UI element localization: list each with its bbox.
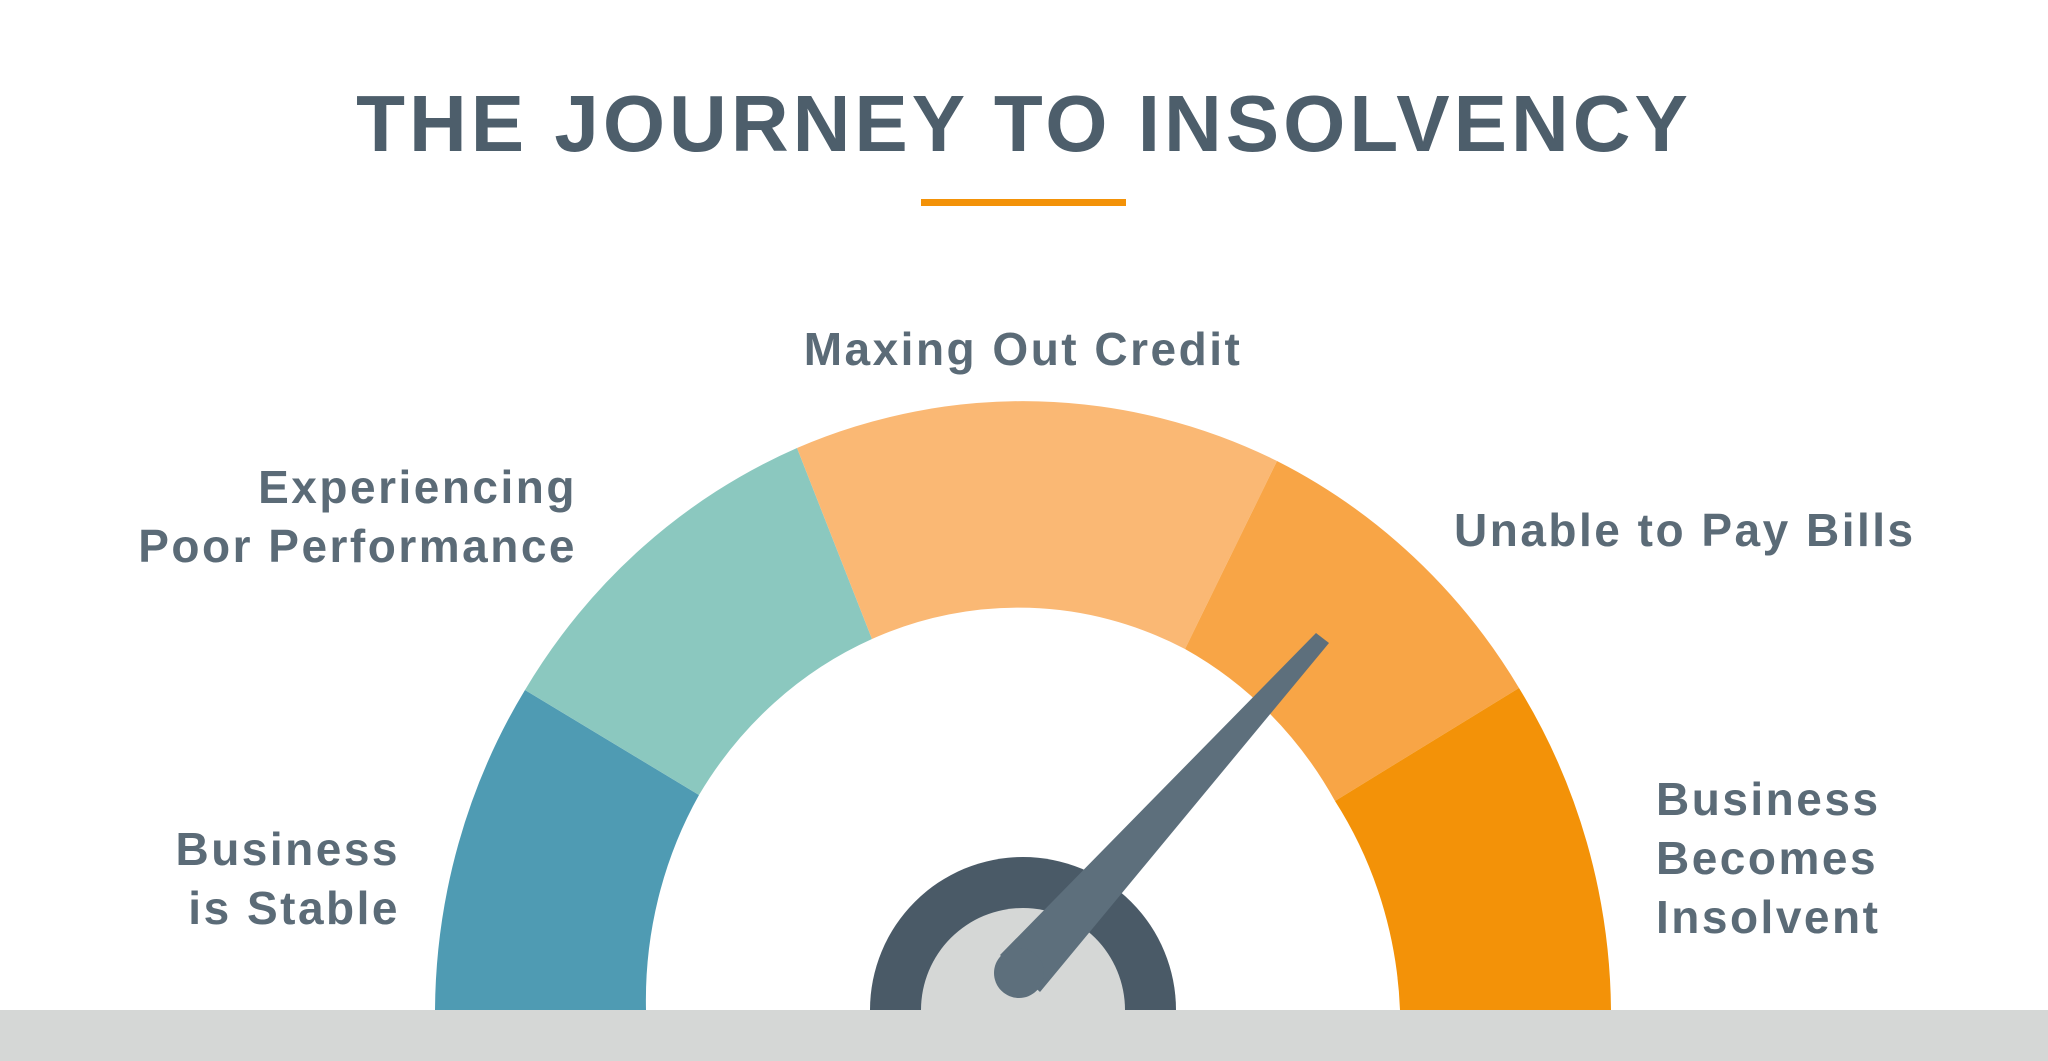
ground band	[0, 1010, 2048, 1061]
label: unable to pay bills: Unable to Pay Bills	[1454, 504, 1916, 556]
needle	[994, 633, 1329, 998]
segment: unable to pay bills	[1185, 461, 1519, 801]
segment: poor performance	[525, 448, 872, 795]
title underline	[921, 199, 1126, 206]
label: maxing out credit: Maxing Out Credit	[804, 323, 1242, 375]
label: experiencing poor performance	[138, 461, 577, 572]
label: experiencing poor performance: Experiencing	[258, 461, 577, 513]
label: business becomes insolvent: Business	[1656, 773, 1881, 825]
title: THE JOURNEY TO INSOLVENCY	[356, 79, 1692, 168]
label: business becomes insolvent: Becomes	[1656, 832, 1878, 884]
segment: business is stable	[435, 690, 699, 1010]
label: experiencing poor performance: Poor Performance	[138, 520, 577, 572]
label: business becomes insolvent	[1656, 773, 1881, 943]
label: business is stable: Business	[175, 823, 400, 875]
hub	[870, 857, 1176, 1010]
segment: maxing out credit	[797, 401, 1277, 649]
label: business becomes insolvent: Insolvent	[1656, 891, 1880, 943]
label: business is stable	[175, 823, 400, 934]
label: business is stable: is Stable	[188, 882, 400, 934]
segment: business becomes insolvent	[1335, 688, 1611, 1010]
